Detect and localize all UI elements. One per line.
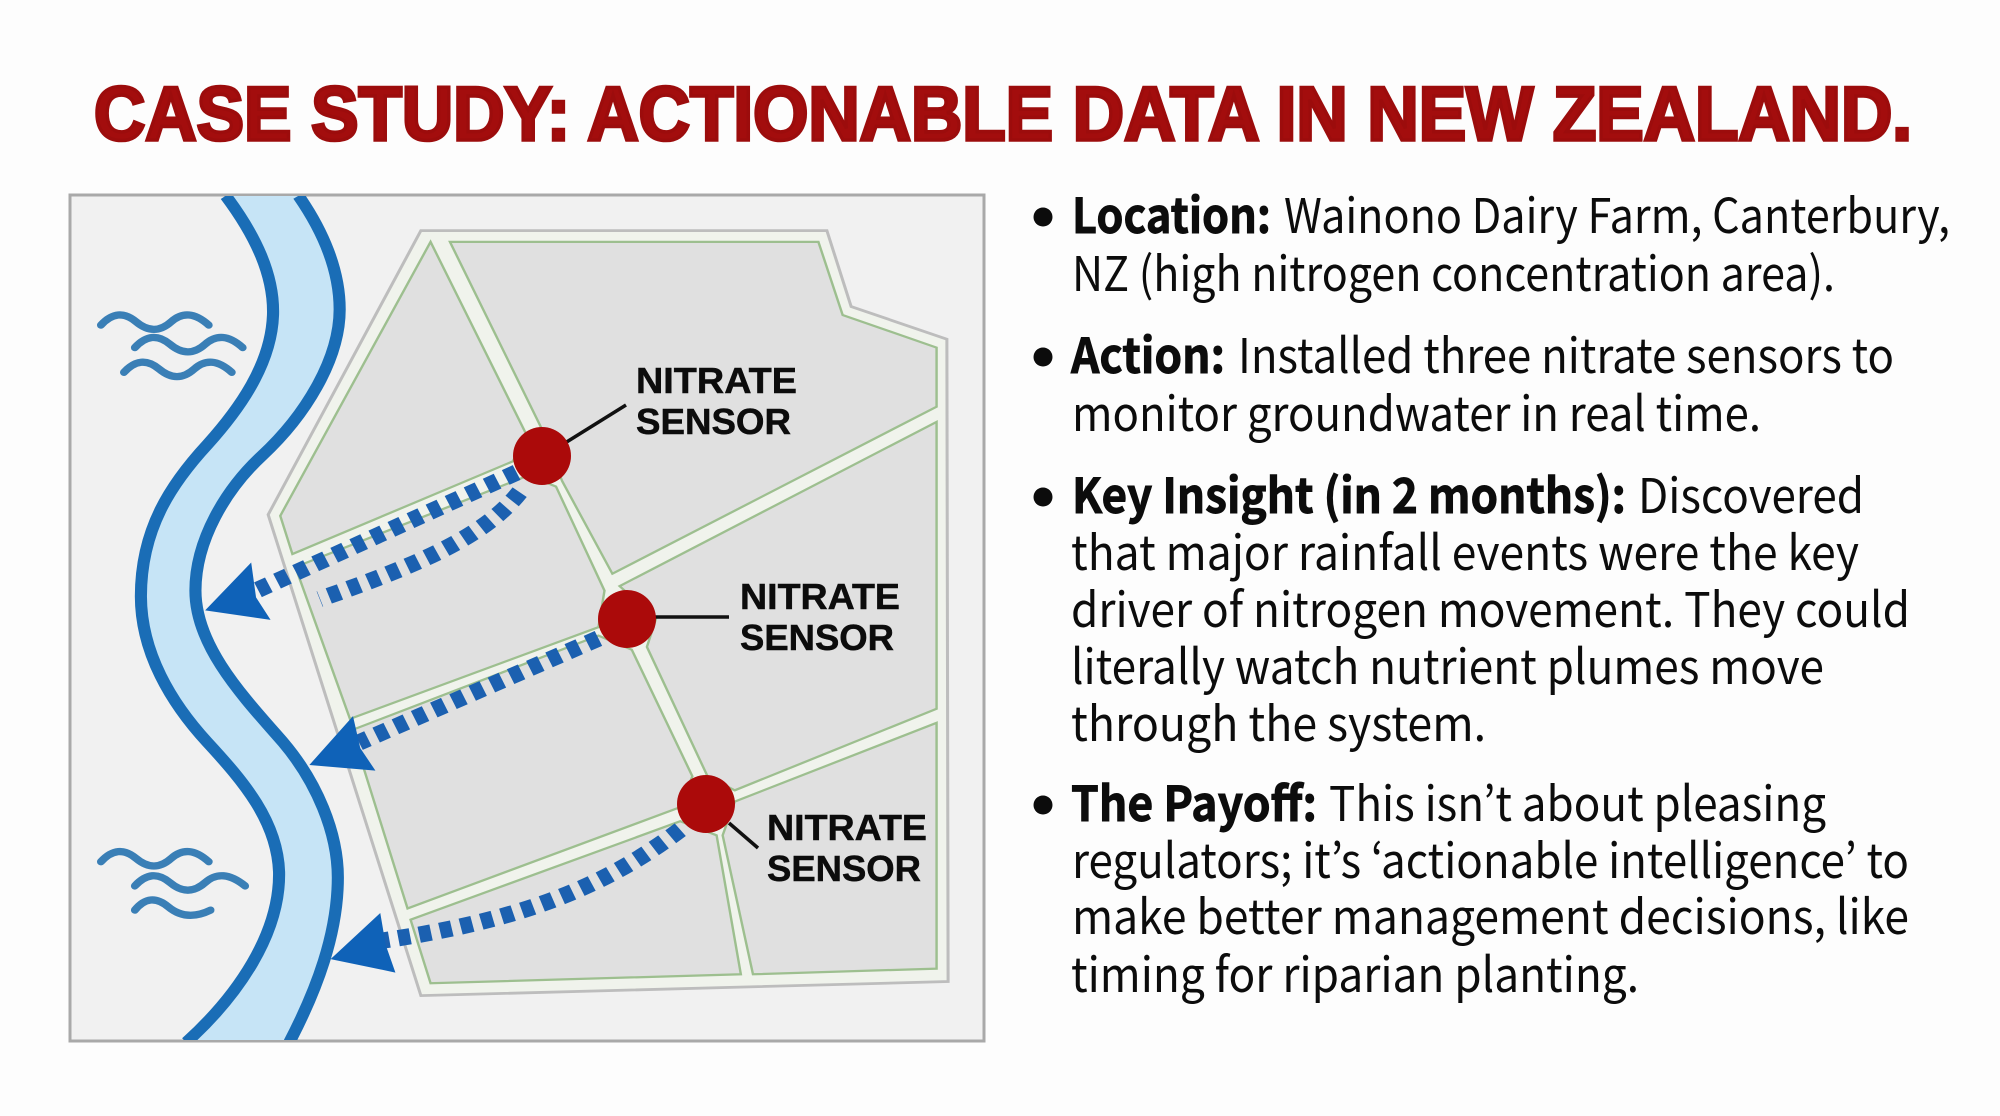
bullet: the payoff: The Payoff: [1071, 765, 1317, 835]
bullet: action: monitor groundwater in real time. [1072, 375, 1761, 445]
bullet: key insight: driver of nitrogen movement. They could [1071, 571, 1910, 641]
bullet: action: Action: [1070, 317, 1225, 387]
arrow: lower flow into river [331, 913, 395, 973]
bullet: key insight: that major rainfall events were the key [1071, 514, 1859, 584]
sensor 2 with leader and label: NITRATE [740, 576, 900, 617]
sensor 3 with leader and label: NITRATE [767, 807, 927, 848]
bullet: key insight: literally watch nutrient plumes move [1071, 628, 1824, 698]
river [141, 196, 340, 1042]
bullet: the payoff [1034, 765, 1909, 1006]
bullet: location: Location: [1072, 177, 1271, 247]
water ripples: upper [101, 315, 243, 377]
bullet list [1034, 177, 1950, 1006]
sensor 1 with leader and label [513, 360, 797, 485]
bullet: key insight: through the system. [1071, 685, 1486, 755]
sensor 1 with leader and label: NITRATE [636, 360, 797, 401]
bullet: key insight: Key Insight (in 2 months): [1072, 457, 1626, 527]
bullet: key insight: Discovered [1638, 457, 1864, 527]
title: CASE STUDY: ACTIONABLE DATA IN NEW ZEALAND. [94, 72, 1912, 157]
bullet: key insight [1034, 457, 1910, 755]
bullet: location [1034, 177, 1950, 305]
arrow: middle flow into river [309, 716, 375, 771]
farm paddocks [268, 231, 948, 996]
panel: farm map [70, 195, 984, 1042]
sensor 2 with leader and label [598, 576, 900, 658]
bullet: the payoff: This isn’t about pleasing [1329, 765, 1826, 835]
bullet: the payoff: make better management decisions, like [1072, 878, 1909, 948]
bullet: action: Installed three nitrate sensors to [1238, 317, 1894, 387]
sensor 1 with leader and label: SENSOR [636, 401, 791, 442]
sensor 2 with leader and label: SENSOR [740, 617, 894, 658]
sensor 3 with leader and label: SENSOR [767, 848, 921, 889]
water ripples: lower [101, 852, 245, 915]
bullet: the payoff: regulators; it’s ‘actionable intelligence’ to [1072, 822, 1909, 892]
dotted nitrate flow paths [256, 472, 680, 940]
bullet: action [1034, 317, 1894, 445]
bullet: location: NZ (high nitrogen concentration area). [1072, 235, 1835, 305]
arrow: upper flow into river [205, 562, 271, 620]
bullet: the payoff: timing for riparian planting. [1071, 936, 1639, 1006]
sensor 3 with leader and label [677, 775, 927, 889]
